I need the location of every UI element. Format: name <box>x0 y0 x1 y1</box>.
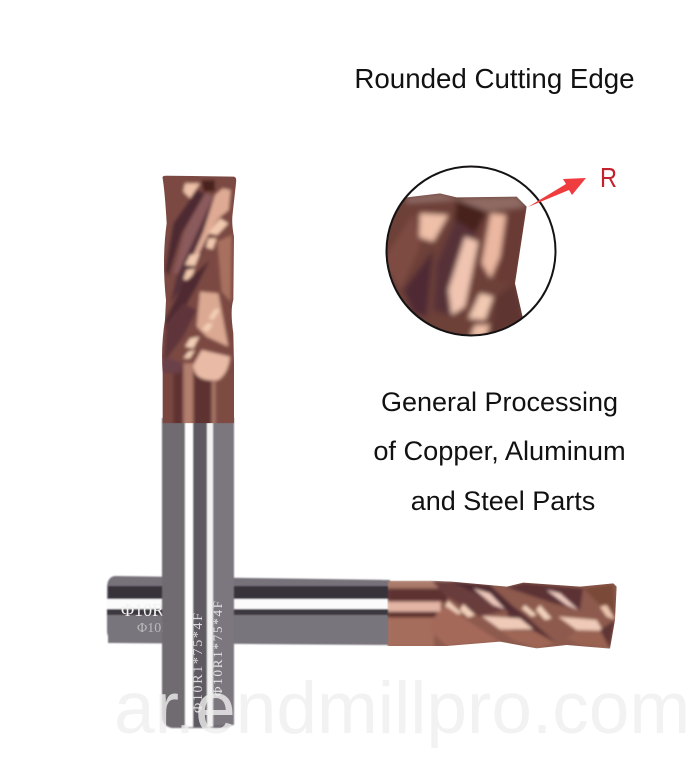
red arrow <box>528 178 586 207</box>
shank engraving <box>191 601 225 713</box>
horizontal end mill <box>107 576 621 650</box>
text: general processing description: and Steel Parts <box>411 486 595 516</box>
horizontal shank <box>107 576 390 645</box>
shank engraving: Φ10R1*75*4F <box>210 601 225 696</box>
vertical end mill <box>161 176 236 729</box>
horizontal shank engraving: Φ10R <box>137 621 171 636</box>
shank engraving: Φ10R1*75*4F <box>191 613 206 713</box>
heading: rounded cutting edge: Rounded Cutting Edge <box>354 63 635 94</box>
circle outline <box>386 166 556 336</box>
vertical coated flutes <box>162 176 236 424</box>
horizontal coated flutes <box>387 580 621 650</box>
circle photo <box>388 193 527 334</box>
text: general processing description: General Processing <box>381 387 618 417</box>
text: general processing description: of Copper, Aluminum <box>373 435 626 466</box>
horizontal shank engraving: Φ10R <box>121 600 164 620</box>
zoomed detail circle <box>386 166 556 336</box>
vertical shank <box>162 418 234 728</box>
text: general processing description <box>373 387 626 516</box>
R label: R <box>600 162 617 193</box>
watermark: ar.endmillpro.com <box>114 668 690 749</box>
horizontal shank engraving <box>121 600 171 636</box>
